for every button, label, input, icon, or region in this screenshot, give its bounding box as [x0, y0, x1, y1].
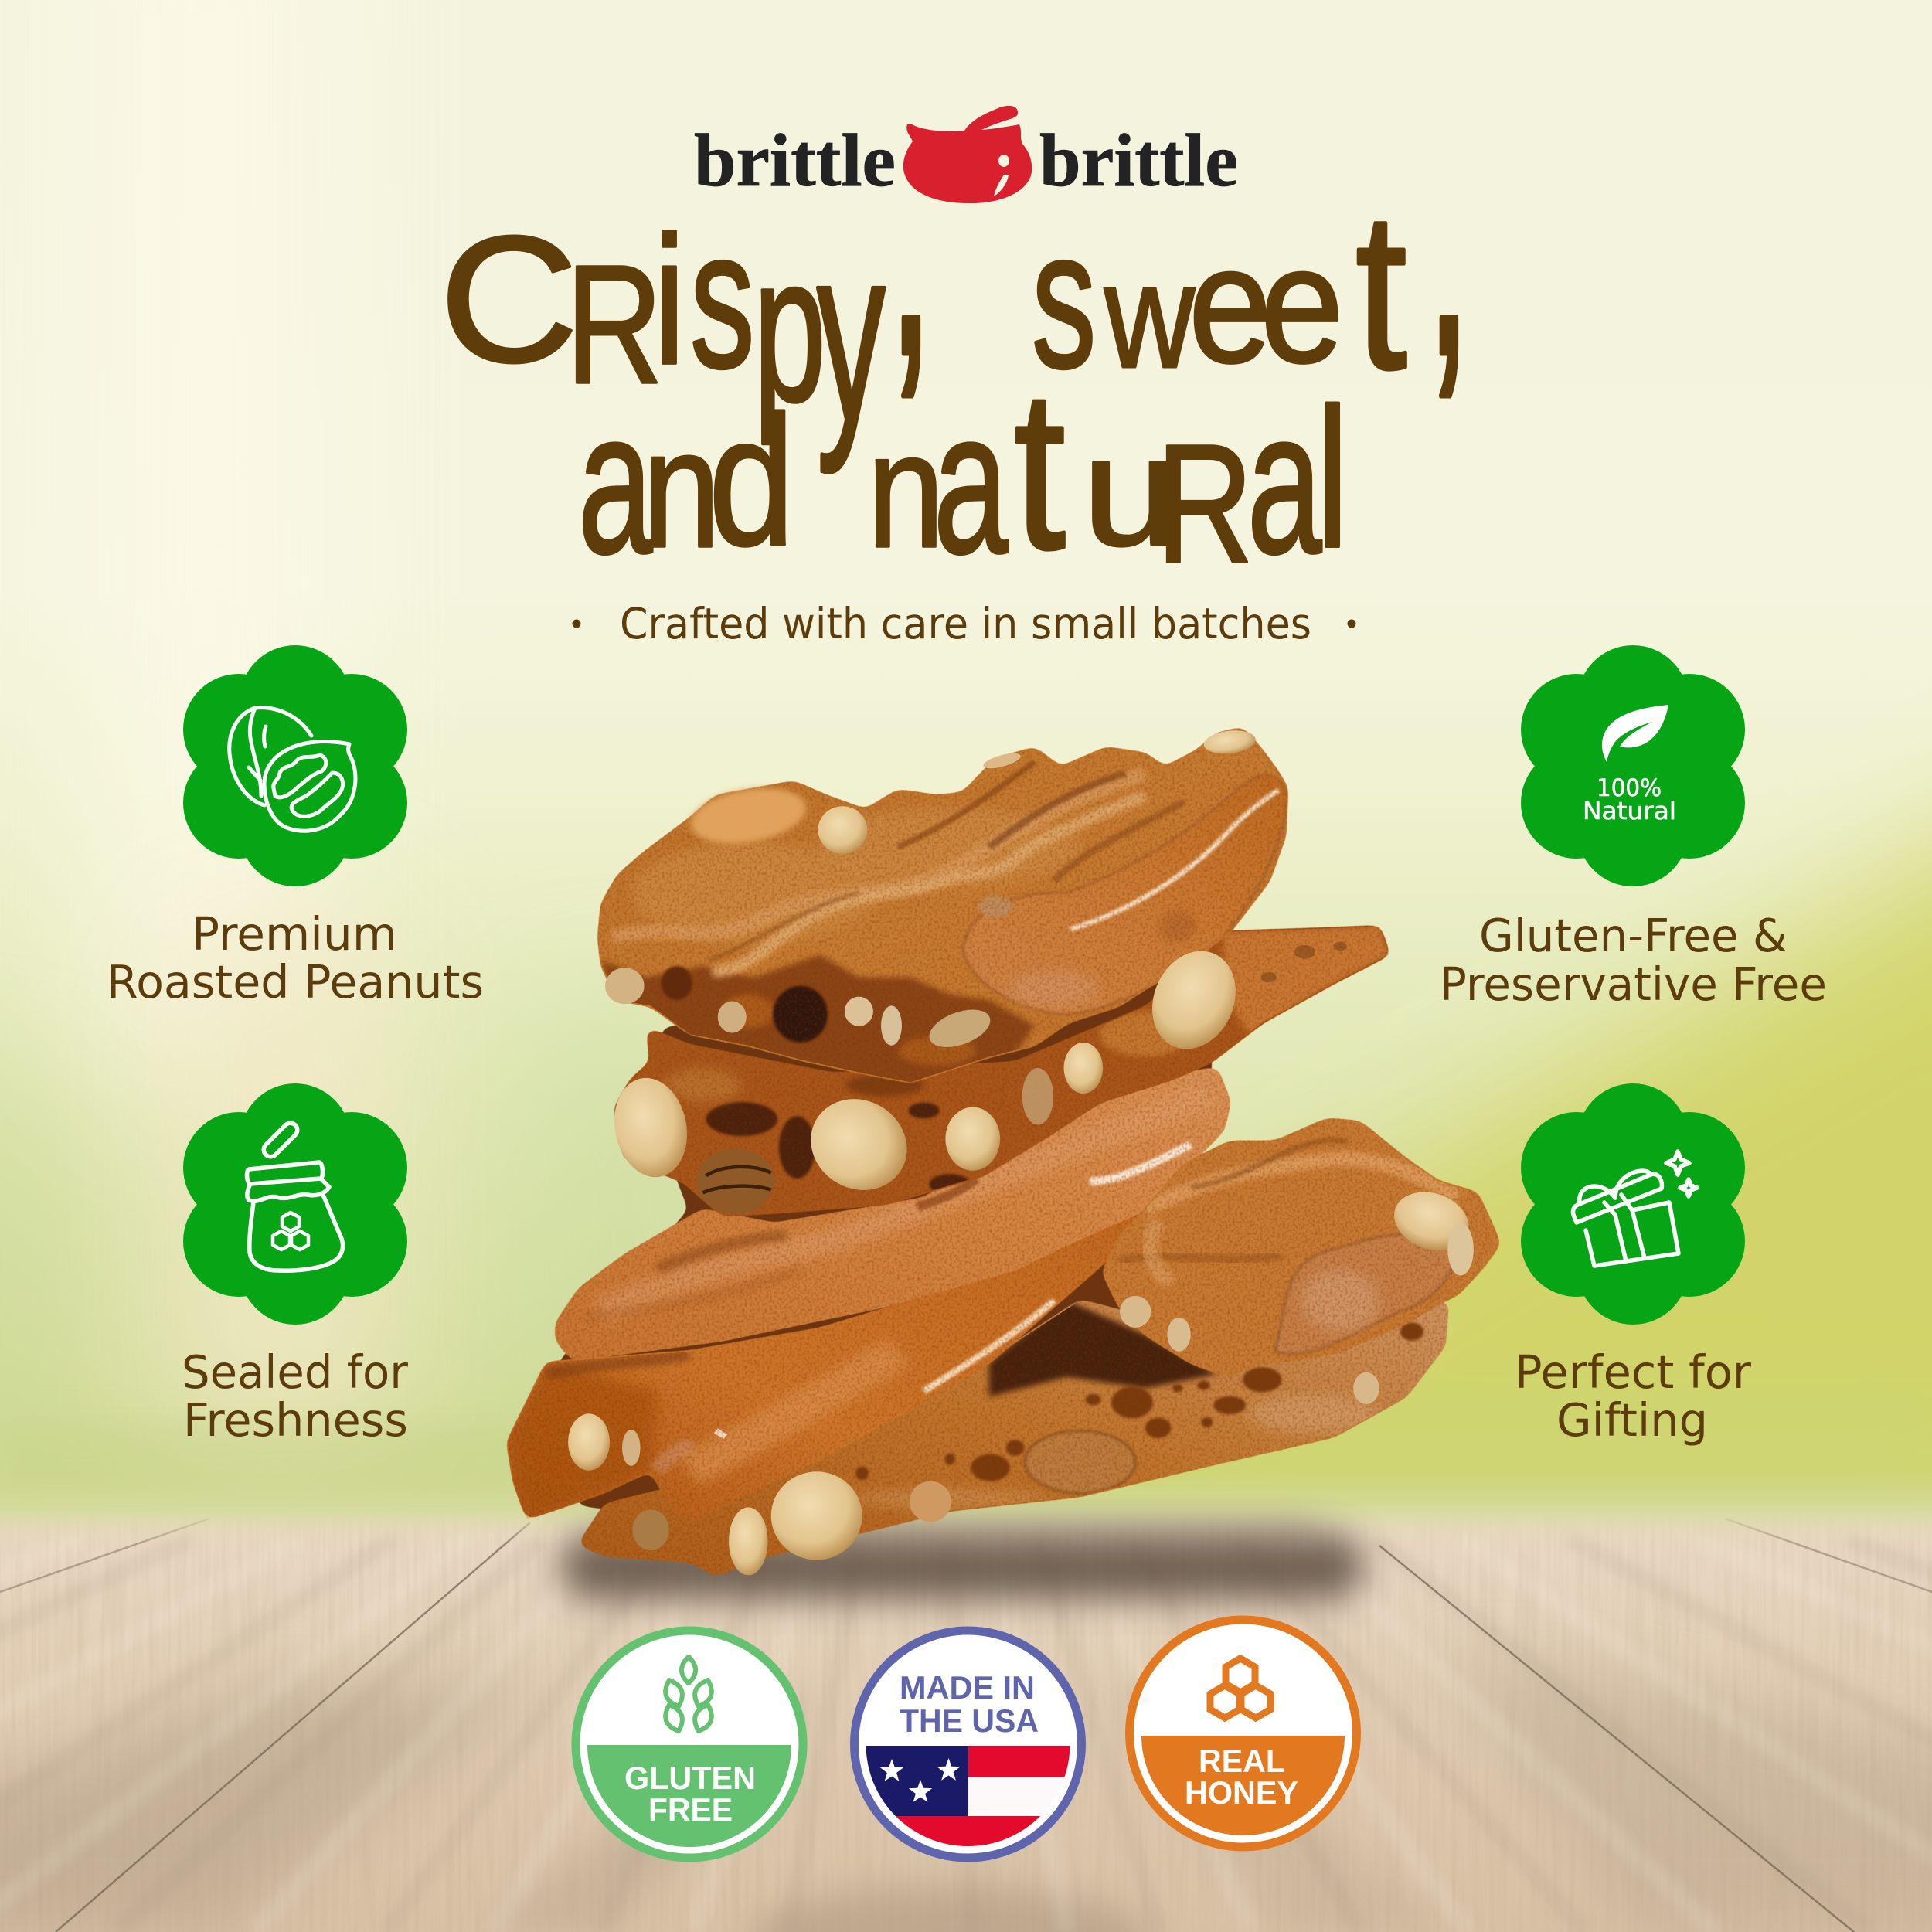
label: premium roasted peanuts: Roasted Peanuts	[107, 955, 484, 1009]
title: Crispy, sweet, and natural: p	[753, 211, 826, 445]
label: gluten-free and preservative free: Preservative Free	[1440, 957, 1827, 1011]
label: premium roasted peanuts: Premium	[192, 907, 397, 961]
title: Crispy, sweet, and natural: ,	[1425, 53, 1472, 424]
label: gluten-free and preservative free: Gluten-Free &	[1479, 909, 1787, 962]
badge: gluten free: GLUTEN	[624, 1760, 756, 1796]
title: Crispy, sweet, and natural: l	[1316, 367, 1349, 589]
label: sealed for freshness: Freshness	[183, 1393, 408, 1447]
badge: real honey: REAL	[1199, 1743, 1285, 1779]
label: premium roasted peanuts	[107, 907, 484, 1009]
brittle piece: slanted glossy	[508, 1204, 1145, 1522]
badge: gluten free: FREE	[648, 1791, 733, 1828]
feature: perfect for gifting	[1515, 1083, 1752, 1447]
title: Crispy, sweet, and natural: n	[643, 396, 720, 583]
badge: real honey: HONEY	[1185, 1774, 1298, 1811]
badge: made in the usa: THE USA	[900, 1702, 1039, 1739]
title: Crispy, sweet, and natural	[439, 53, 1472, 597]
label: sealed for freshness: Sealed for	[182, 1345, 409, 1399]
icon: 100% natural leaf in green flower: Natural	[1583, 798, 1676, 825]
background: blurred green and cream backdrop	[0, 0, 1932, 1546]
title: Crispy, sweet, and natural: d	[709, 378, 794, 583]
badge: gluten free	[576, 1631, 803, 1858]
title: Crispy, sweet, and natural: s	[1032, 189, 1096, 409]
label: sealed for freshness	[182, 1345, 409, 1447]
badge: made in the usa	[855, 1631, 1082, 1858]
logo: brittle brittle with red pot: brittle	[1039, 119, 1238, 202]
label: gluten-free and preservative free	[1440, 909, 1827, 1011]
title: Crispy, sweet, and natural: R	[566, 230, 663, 418]
title: Crispy, sweet, and natural: R	[1156, 409, 1253, 597]
title: Crispy, sweet, and natural: t	[1355, 166, 1407, 416]
brittle piece: middle flat toffee	[556, 1068, 1230, 1360]
drop shadow under brittle	[560, 1519, 1364, 1600]
product illustration: stack of peanut brittle	[508, 728, 1500, 1575]
title: Crispy, sweet, and natural: C	[439, 199, 578, 400]
logo: brittle brittle with red pot: brittle	[694, 119, 896, 202]
feature: sealed for freshness	[182, 1083, 409, 1447]
badge: made in the usa: MADE IN	[900, 1669, 1035, 1706]
subtitle: crafted with care: Crafted with care in small batches	[620, 599, 1311, 648]
feature: premium roasted peanuts	[107, 645, 484, 1009]
icon: american flag	[866, 1746, 1070, 1849]
feature: gluten-free and preservative free	[1440, 645, 1827, 1011]
icon: 100% natural leaf in green flower	[1521, 645, 1745, 886]
icon: red pot	[903, 106, 1032, 203]
title: Crispy, sweet, and natural: a	[934, 369, 1009, 596]
brittle piece: nutty middle layer	[615, 927, 1389, 1216]
title: Crispy, sweet, and natural: a	[578, 369, 653, 596]
brittle piece: upper right ridged	[1103, 1119, 1500, 1377]
peanuts embedded in brittle	[568, 728, 1481, 1575]
icon: gift in green flower	[1521, 1083, 1745, 1325]
icon: honey jar in green flower	[183, 1083, 407, 1325]
title: Crispy, sweet, and natural: a	[1247, 369, 1322, 596]
label: perfect for gifting	[1515, 1345, 1752, 1447]
title: Crispy, sweet, and natural: s	[690, 189, 754, 409]
label: perfect for gifting: Gifting	[1556, 1393, 1708, 1447]
icon: 100% natural leaf in green flower: 100%	[1597, 774, 1662, 802]
brittle piece: bottom honeycomb	[579, 1301, 1447, 1575]
title: Crispy, sweet, and natural: u	[1083, 403, 1177, 578]
brittle core filling gaps between pieces	[560, 949, 1210, 1527]
title: Crispy, sweet, and natural: e	[1189, 213, 1272, 397]
wooden table with perspective planks	[0, 1468, 1932, 1932]
logo: brittle brittle with red pot	[694, 106, 1238, 203]
badge: real honey	[1130, 1620, 1357, 1847]
icon: honeycomb	[1210, 1658, 1270, 1718]
title: Crispy, sweet, and natural: ,	[887, 53, 934, 424]
title: Crispy, sweet, and natural: t	[1014, 342, 1066, 596]
title: Crispy, sweet, and natural: w	[1104, 231, 1196, 399]
label: perfect for gifting: Perfect for	[1515, 1345, 1752, 1399]
icon: wheat	[662, 1657, 716, 1734]
title: Crispy, sweet, and natural: n	[867, 398, 944, 581]
title: Crispy, sweet, and natural: i	[653, 199, 685, 403]
brittle piece: top ridged round	[599, 728, 1287, 1090]
title: Crispy, sweet, and natural: y	[817, 195, 886, 475]
icon: walnut in green flower	[183, 645, 407, 886]
title: Crispy, sweet, and natural: e	[1260, 213, 1344, 397]
